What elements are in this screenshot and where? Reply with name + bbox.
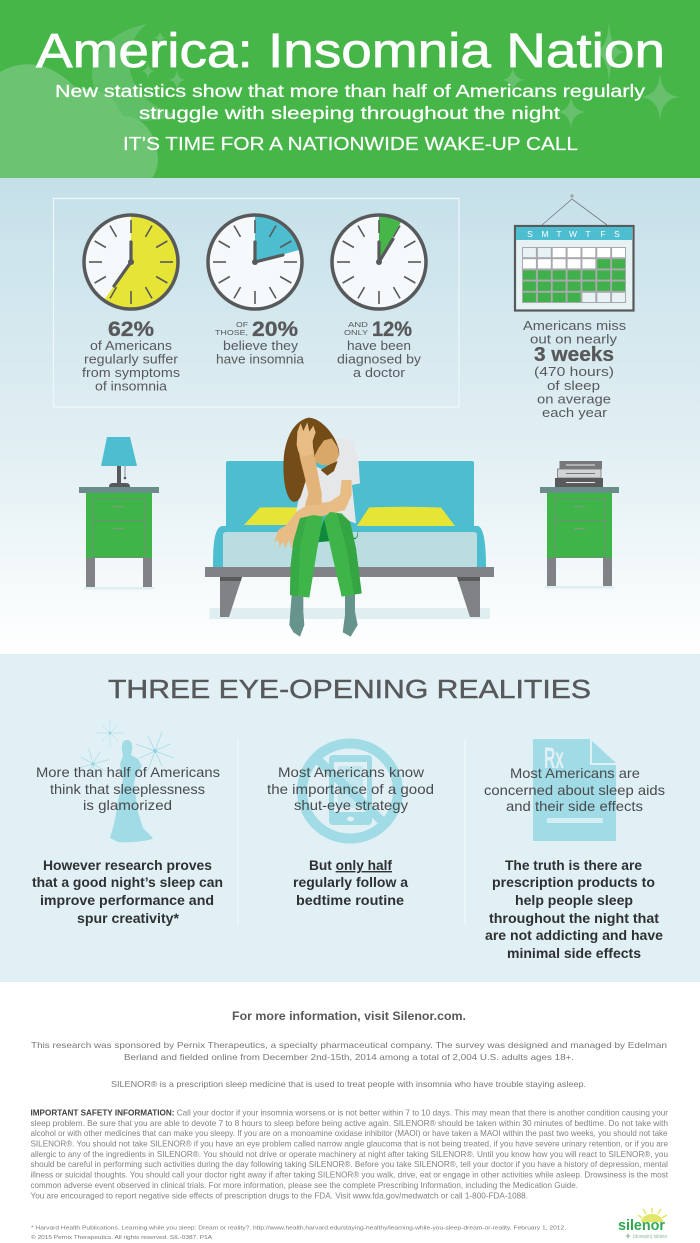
text: 62%: of insomnia [95, 378, 168, 394]
text: 12% [337, 318, 422, 380]
icon: silenor logo: (doxepin) tablets [633, 1234, 667, 1240]
subtitle: New statistics show that more than half of Americans regularly [55, 81, 645, 101]
text: important safety information: common adverse event observed in clinical trials. For more information, please see the complete Prescribing Information, including the Medication Guide. [30, 1180, 578, 1190]
tagline: IT’S TIME FOR A NATIONWIDE WAKE-UP CALL [123, 134, 578, 154]
text: important safety information: illness or suicidal thoughts. You should call your doctor right away if after taking SILENOR® you walk, drive, eat or engage in other activities while asleep. Drowsiness is the most [30, 1170, 669, 1180]
arms [283, 480, 352, 532]
text: column 3: The truth is there are [505, 857, 642, 873]
icon: calendar: M [541, 229, 549, 239]
text: calendar stat: out on nearly [530, 332, 618, 346]
icon: lamp [101, 437, 137, 487]
text: 62%: regularly suffer [84, 352, 179, 366]
title: America: Insomnia Nation [36, 25, 665, 78]
illustration: bed [205, 461, 494, 619]
text: column 1 [32, 764, 223, 926]
chart: clock 62% [84, 215, 179, 309]
text: research note: This research was sponsored by Pernix Therapeutics, a specialty pharmaceutical company. The survey was designed and managed by Edelman [31, 1040, 667, 1050]
text: research note [31, 1040, 667, 1062]
text: important safety information: alcohol or with other medicines that can make you sleepy. If you are on a monoamine oxidase inhibitor (MAOI) or have taken a MAOI within the past two weeks, you should not take [30, 1128, 668, 1138]
icon: calendar [515, 194, 634, 310]
icon: cloud [0, 64, 158, 178]
hair [283, 418, 339, 502]
text: column 3: prescription products to [492, 874, 655, 890]
text: 20%: 20% [252, 318, 298, 341]
heading: THREE EYE-OPENING REALITIES [108, 674, 591, 704]
text: column 2: regularly follow a [293, 874, 408, 890]
icon: calendar: S [527, 229, 533, 239]
text: 12%: have been [347, 338, 411, 353]
text: column 3: throughout the night that [489, 910, 659, 926]
text: important safety information: IMPORTANT SAFETY INFORMATION: Call your doctor if your insomnia worsens or is not better within 7 to 10 days. This may mean that there is another condition causing your [30, 1108, 668, 1118]
text: column 2: Most Americans know [278, 764, 425, 780]
icon: silenor logo [618, 1208, 667, 1240]
subtitle: struggle with sleeping throughout the night [139, 103, 560, 123]
text: 20%: have insomnia [216, 352, 305, 366]
text: calendar stat: (470 hours) [534, 364, 614, 379]
text: important safety information [30, 1108, 669, 1200]
icon: calendar: F [600, 229, 606, 239]
icon: moon [92, 24, 177, 121]
text: column 1: think that sleeplessness [50, 781, 205, 797]
face [315, 438, 339, 465]
hand on head [297, 422, 316, 457]
text: column 2: the importance of a good [267, 781, 434, 797]
dangling hand [274, 527, 297, 549]
illustration: woman sitting on bed [274, 418, 362, 637]
text: important safety information: You are encouraged to report negative side effects of prescription drugs to the FDA. Visit www.fda.gov/medwatch or call 1-800-FDA-1088. [30, 1190, 528, 1200]
text: more information: For more information, visit Silenor.com. [232, 1009, 466, 1023]
subtitle [55, 81, 645, 123]
icon: calendar: T [556, 229, 562, 239]
text: calendar stat: Americans miss [523, 318, 627, 333]
text: important safety information: should be careful in performing such activities during the day following taking SILENOR®. Before you take SILENOR®, tell your doctor if you have a history of depression, mental [30, 1159, 668, 1169]
text: 12%: diagnosed by [337, 352, 422, 366]
text: 20% [215, 318, 305, 366]
text: 12%: AND [348, 322, 368, 329]
icon: prescription document: Rx [544, 742, 564, 775]
shirt [296, 438, 360, 523]
text: column 3: minimal side effects [507, 945, 641, 961]
panel: footer [30, 1009, 669, 1241]
text: column 2 [267, 764, 434, 908]
text: calendar stat: 3 weeks [534, 344, 614, 366]
text: 62%: of Americans [90, 338, 173, 353]
icon: silenor logo: silenor [618, 1217, 665, 1234]
text: 12%: 12% [372, 318, 412, 341]
chart: clock 12% [332, 215, 426, 309]
text: column 3: help people sleep [515, 892, 633, 908]
text: column 1: improve performance and [40, 892, 214, 908]
text: 12%: a doctor [353, 365, 406, 380]
text: calendar stat [523, 318, 627, 420]
icon: books [555, 461, 603, 487]
icon: calendar: S [614, 229, 620, 239]
text: column 1: is glamorized [83, 797, 172, 813]
text: important safety information: sleep problem. Be sure that you are able to devote 7 to 8 hours to sleep before being active again. SILENOR® should be taken within 30 minutes of bedtime. Do not take with [30, 1118, 668, 1128]
text: 62%: 62% [108, 318, 154, 341]
panel: sky background [0, 178, 700, 654]
text: important safety information: SILENOR®. You should not take SILENOR® if you have an eye problem called narrow angle glaucoma that is not being treated, if you have severe urinary retention, or if you are [30, 1138, 668, 1148]
panel: header [0, 0, 700, 178]
text: column 3: are not addicting and have [485, 927, 663, 943]
hair lock [321, 461, 338, 476]
text: silenor description: SILENOR® is a prescription sleep medicine that is used to treat people with insomnia who have trouble staying asleep. [111, 1079, 586, 1089]
text: column 1: spur creativity* [77, 910, 180, 926]
icon: calendar: W [569, 229, 577, 239]
panel: clock statistics [54, 198, 459, 407]
text: column 2: shut-eye strategy [294, 797, 408, 813]
icon: prescription document [533, 739, 616, 841]
text: 62%: from symptoms [82, 365, 181, 380]
text: footnote: * Harvard Health Publications. Learning while you sleep: Dream or reality?. http://www.health.harvard.edu/staying-healthy/learning-while-you-sleep-dream-or-reality. February 1, 2012. [31, 1226, 566, 1232]
text: column 3: and their side effects [506, 798, 643, 814]
text: 20%: OF [236, 322, 248, 329]
text: footnote [31, 1226, 566, 1241]
text: column 3: concerned about sleep aids [484, 782, 665, 798]
text: calendar stat: each year [542, 405, 608, 420]
text: calendar stat: on average [537, 392, 611, 406]
icon: gown silhouette with sparkles [72, 719, 181, 842]
text: important safety information: allergic to any of the ingredients in SILENOR®. You should not drive or operate machinery at night after taking SILENOR®. Until you know how you will react to SILENOR®, you [30, 1149, 668, 1159]
illustration: right nightstand and books [540, 461, 619, 588]
text: 20%: believe they [223, 338, 299, 353]
illustration: left nightstand and lamp [79, 437, 159, 590]
text: column 2: bedtime routine [296, 892, 404, 908]
text: footnote: © 2015 Pernix Therapeutics. All rights reserved. SIL-0387. P1A [31, 1234, 213, 1241]
text: calendar stat: of sleep [547, 378, 600, 393]
icon: crossed-out phone [302, 744, 398, 838]
panel: three realities [0, 654, 700, 982]
trousers [317, 519, 359, 542]
chart: clock 20% [208, 215, 302, 309]
text: column 1: However research proves [43, 857, 212, 873]
text: column 2: But only half [309, 857, 392, 873]
text: column 1: More than half of Americans [36, 764, 220, 780]
socks [289, 593, 358, 637]
text: research note: Berland and fielded online from December 2nd-15th, 2014 among a total of 2,004 U.S. adults ages 18+. [124, 1052, 574, 1062]
text: 20%: THOSE, [215, 330, 248, 337]
text: column 3: Most Americans are [510, 765, 640, 781]
icon: calendar: T [585, 229, 591, 239]
text: column 3 [484, 765, 665, 961]
icon: sparkles [141, 20, 680, 129]
text: 12%: ONLY [344, 330, 368, 337]
text: 62% [82, 318, 181, 394]
text: column 1: that a good night’s sleep can [32, 874, 223, 890]
